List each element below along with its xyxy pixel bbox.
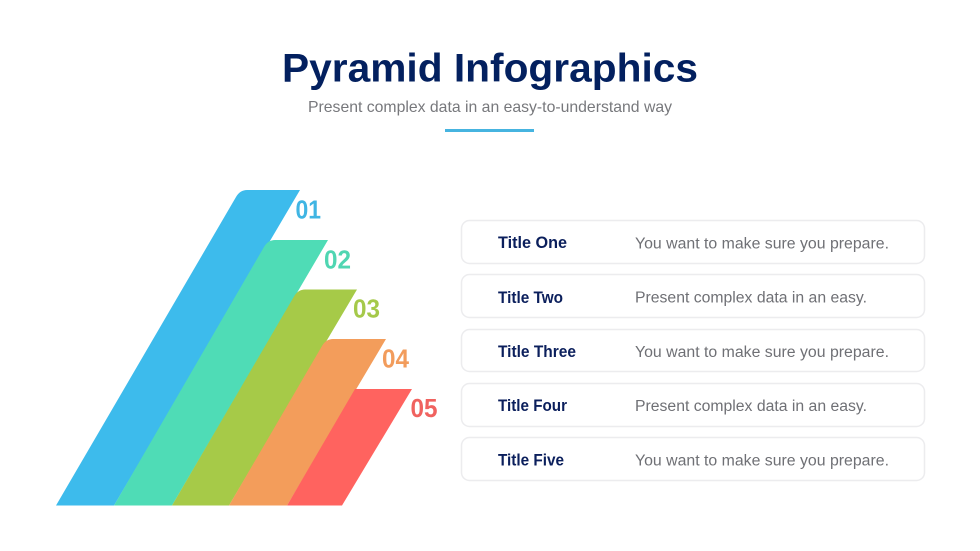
row 5	[462, 438, 924, 480]
row 5 card	[462, 438, 924, 480]
band 1: blue	[56, 190, 300, 506]
band 5: red	[287, 389, 412, 506]
row 4 title: Title Four	[498, 396, 567, 415]
band 4: orange	[229, 339, 386, 506]
row 3 card	[462, 330, 924, 372]
pyramid chart	[56, 190, 412, 506]
row 5 description: You want to make sure you prepare.	[635, 452, 889, 470]
number 02: 02	[324, 246, 351, 274]
row 3 title: Title Three	[498, 342, 576, 361]
row 4	[462, 384, 924, 426]
row 1	[462, 220, 924, 264]
row 2	[462, 274, 924, 318]
row 5 title: Title Five	[498, 450, 564, 470]
band 2: green	[114, 240, 328, 506]
number 05: 05	[410, 395, 438, 423]
row 4 card	[462, 384, 924, 426]
row 3	[462, 330, 924, 372]
subtitle: Present complex data in an easy-to-understand way	[308, 99, 672, 116]
row 3 description: You want to make sure you prepare.	[635, 344, 889, 361]
row 2 card	[462, 274, 924, 318]
number 01: 01	[296, 196, 321, 224]
row 1 title: Title One	[498, 233, 567, 252]
number 04: 04	[382, 346, 410, 374]
title: Pyramid Infographics	[282, 46, 698, 90]
row 1 card	[462, 220, 924, 264]
row 2 description: Present complex data in an easy.	[635, 290, 867, 306]
row 2 title: Title Two	[498, 288, 563, 307]
row 4 description: Present complex data in an easy.	[635, 398, 867, 415]
number 03: 03	[353, 296, 380, 324]
title underline	[445, 129, 534, 132]
row 1 description: You want to make sure you prepare.	[635, 236, 889, 252]
band 3: olive	[172, 290, 357, 506]
